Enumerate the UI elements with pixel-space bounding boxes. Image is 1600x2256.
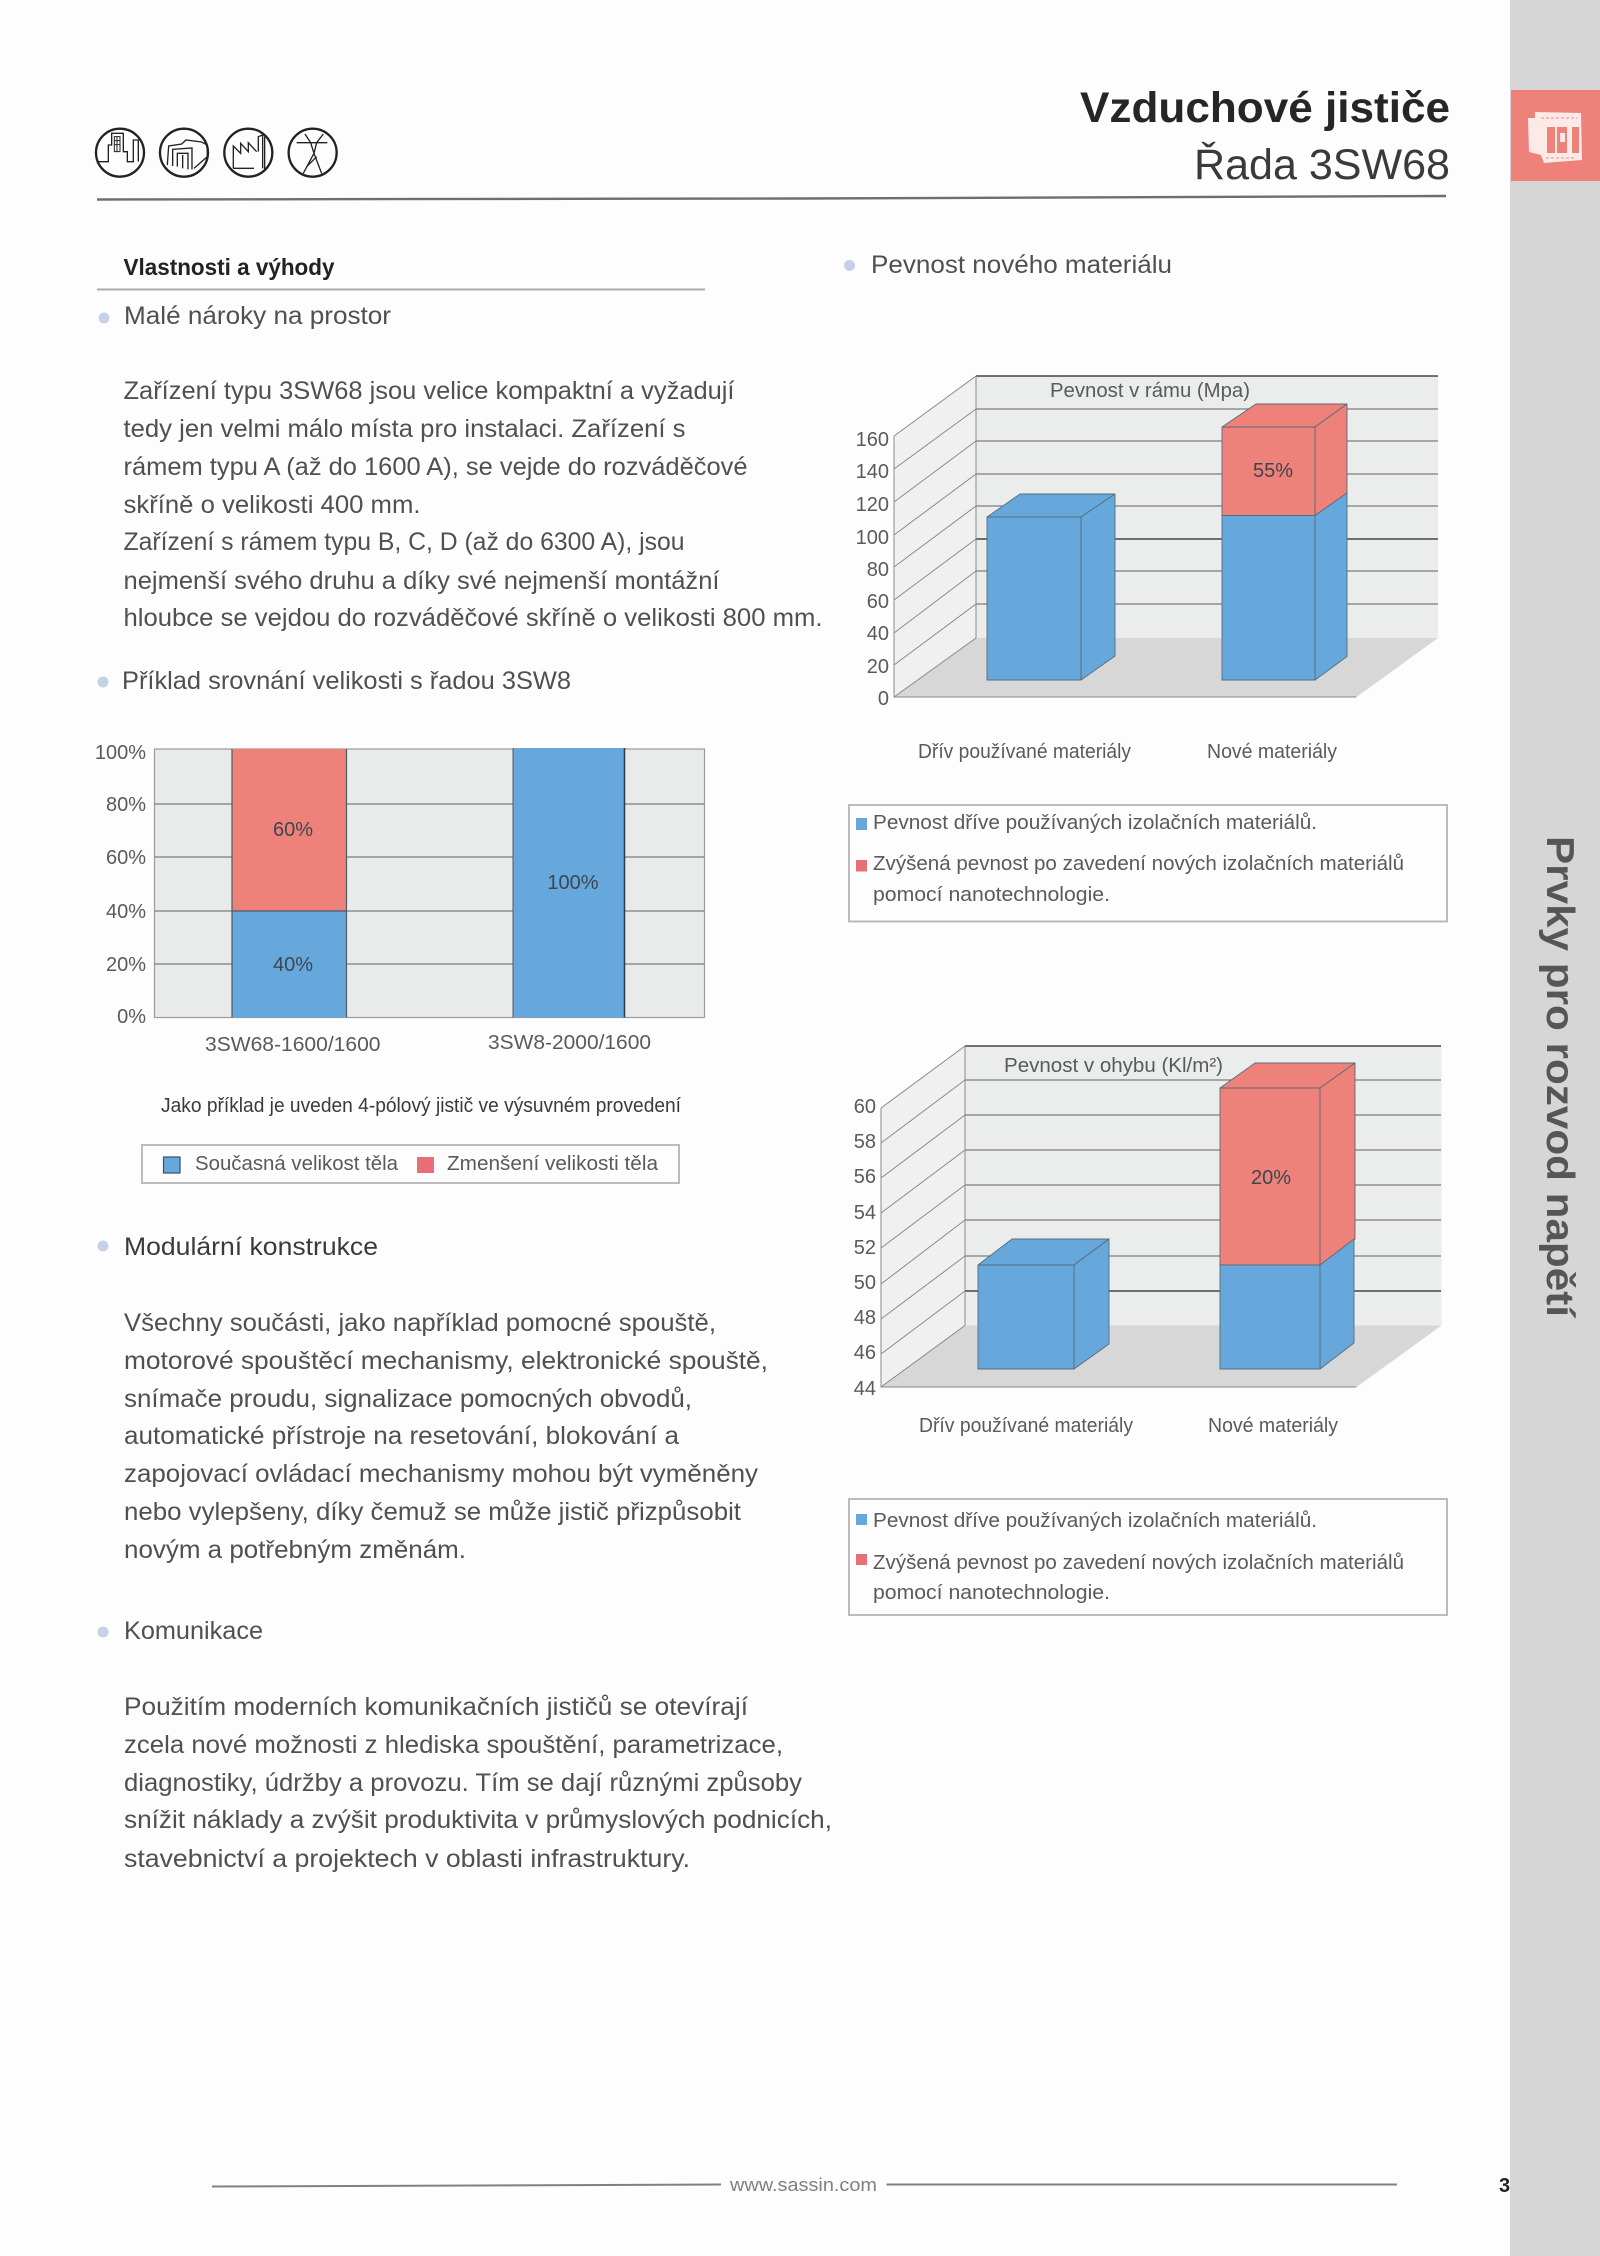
- text block: communication: [124, 1693, 832, 1873]
- sidebar title: Prvky pro rozvod napětí: [1538, 836, 1581, 1318]
- bar: 3SW68: [232, 749, 346, 1018]
- x axis labels: Nové materiály: [1208, 1415, 1338, 1437]
- legend: size comparison: Zmenšení velikosti těla: [447, 1153, 659, 1175]
- heading: small space requirement: Malé nároky na prostor: [124, 302, 391, 330]
- text block: communication: stavebnictví a projektech v oblasti infrastruktury.: [124, 1845, 690, 1873]
- text block: communication: zcela nové možnosti z hlediska spouštění, parametrizace,: [124, 1731, 783, 1759]
- icon: air circuit breaker: [1528, 112, 1582, 163]
- y axis labels: 58: [854, 1131, 876, 1153]
- text block: modular construction: Všechny součásti, jako například pomocné spouště,: [124, 1309, 716, 1337]
- heading: modular construction: Modulární konstrukce: [124, 1233, 378, 1261]
- text block: communication: Použitím moderních komunikačních jističů se otevírají: [124, 1693, 748, 1721]
- icon: factory: [224, 129, 272, 177]
- text block: compactness: hloubce se vejdou do rozváděčové skříně o velikosti 800 mm.: [124, 604, 822, 632]
- text block: modular construction: [124, 1309, 768, 1564]
- note: Jako příklad je uveden 4-pólový jistič ve výsuvném provedení: [161, 1095, 681, 1117]
- y axis labels: 140: [856, 461, 889, 483]
- icon: warehouse: [160, 129, 208, 177]
- header icons: [96, 129, 337, 177]
- chart title: Pevnost v ohybu (Kl/m²): [1004, 1055, 1223, 1077]
- y axis labels: 40: [867, 623, 889, 645]
- text block: compactness: nejmenší svého druhu a díky své nejmenší montážní: [124, 567, 720, 595]
- y axis labels: 160: [856, 429, 889, 451]
- icon: buildings: [96, 129, 144, 177]
- y axis labels: [95, 742, 146, 1028]
- header rule: [97, 196, 1446, 200]
- y axis labels: 80%: [106, 794, 146, 816]
- footer: www.sassin.com: [729, 2175, 877, 2195]
- text block: compactness: Zařízení s rámem typu B, C, D (až do 6300 A), jsou: [124, 528, 684, 556]
- y axis labels: 80: [867, 559, 889, 581]
- bar: 3SW8: 100%: [547, 872, 599, 894]
- y axis labels: [854, 1096, 876, 1400]
- legend: frame strength: Zvýšená pevnost po zavedení nových izolačních materiálů: [873, 853, 1404, 875]
- chart title: Pevnost v rámu (Mpa): [1050, 380, 1250, 402]
- x axis labels: Dřív používané materiály: [919, 1415, 1133, 1437]
- bar: previous materials: [978, 1239, 1109, 1369]
- bar: 3SW8: [513, 748, 624, 1018]
- x axis labels: Dřív používané materiály: [918, 741, 1131, 763]
- text block: modular construction: nebo vylepšeny, díky čemuž se může jistič přizpůsobit: [124, 1498, 741, 1526]
- text block: compactness: [124, 377, 822, 632]
- legend: size comparison: [142, 1145, 679, 1183]
- chart walls and floor: [881, 1046, 1442, 1387]
- text block: modular construction: zapojovací ovládací mechanismy mohou být vyměněny: [124, 1460, 759, 1488]
- y axis labels: 44: [854, 1378, 876, 1400]
- x axis labels: Nové materiály: [1207, 741, 1337, 763]
- heading: new material strength: Pevnost nového materiálu: [871, 251, 1172, 279]
- bar: previous materials: [987, 494, 1115, 680]
- chart walls and floor: [894, 376, 1438, 697]
- text block: modular construction: snímače proudu, signalizace pomocných obvodů,: [124, 1385, 692, 1413]
- sidebar: [1499, 0, 1600, 2256]
- bar: new materials: 55%: [1253, 460, 1293, 482]
- x axis labels: 3SW8-2000/1600: [488, 1032, 651, 1054]
- text block: modular construction: novým a potřebným změnám.: [124, 1536, 466, 1564]
- text block: communication: diagnostiky, údržby a provozu. Tím se dají různými způsoby: [124, 1769, 802, 1797]
- text block: compactness: tedy jen velmi málo místa pro instalaci. Zařízení s: [124, 415, 686, 443]
- section heading: features: Vlastnosti a výhody: [124, 254, 335, 280]
- bar: 3SW68: 40%: [273, 954, 313, 976]
- title: [1080, 84, 1450, 189]
- legend: frame strength: [849, 805, 1447, 922]
- legend: bending strength: pomocí nanotechnologie.: [873, 1582, 1110, 1604]
- y axis labels: 20%: [106, 954, 146, 976]
- text block: compactness: Zařízení typu 3SW68 jsou velice kompaktní a vyžadují: [124, 377, 735, 405]
- y axis labels: 48: [854, 1307, 876, 1329]
- bar: 3SW68: 60%: [273, 819, 313, 841]
- y axis labels: 54: [854, 1202, 876, 1224]
- y axis labels: 50: [854, 1272, 876, 1294]
- bar chart: size comparison: [95, 742, 704, 1056]
- y axis labels: 20: [867, 656, 889, 678]
- x axis labels: [205, 1032, 651, 1056]
- y axis labels: 52: [854, 1237, 876, 1259]
- x axis labels: 3SW68-1600/1600: [205, 1034, 380, 1056]
- legend: bending strength: [849, 1499, 1447, 1615]
- y axis labels: 0%: [117, 1006, 146, 1028]
- y axis labels: 60: [867, 591, 889, 613]
- y axis labels: 56: [854, 1166, 876, 1188]
- heading: communication: Komunikace: [124, 1617, 263, 1645]
- y axis labels: 0: [878, 688, 889, 710]
- page number: 3: [1499, 2175, 1510, 2197]
- y axis labels: 46: [854, 1342, 876, 1364]
- text block: compactness: rámem typu A (až do 1600 A), se vejde do rozváděčové: [124, 453, 748, 481]
- text block: modular construction: automatické přístroje na resetování, blokování a: [124, 1422, 679, 1450]
- legend: frame strength: Pevnost dříve používaných izolačních materiálů.: [873, 812, 1317, 834]
- 3d bar chart: bending strength: [854, 1046, 1442, 1437]
- icon: power pylon: [289, 129, 337, 177]
- y axis labels: [856, 429, 889, 710]
- y axis labels: 40%: [106, 901, 146, 923]
- y axis labels: 100: [856, 527, 889, 549]
- legend: bending strength: Zvýšená pevnost po zavedení nových izolačních materiálů: [873, 1552, 1404, 1574]
- bar: new materials: 20%: [1251, 1167, 1291, 1189]
- sidebar tab: [1511, 90, 1600, 181]
- legend: bending strength: Pevnost dříve používaných izolačních materiálů.: [873, 1510, 1317, 1532]
- y axis labels: 60%: [106, 847, 146, 869]
- bar: new materials: [1222, 404, 1347, 680]
- legend: frame strength: pomocí nanotechnologie.: [873, 884, 1110, 906]
- legend: size comparison: Současná velikost těla: [195, 1153, 399, 1175]
- x axis labels: [918, 741, 1337, 763]
- 3d bar chart: frame strength: [856, 376, 1438, 763]
- subtitle: Řada 3SW68: [1194, 141, 1450, 189]
- y axis labels: 120: [856, 494, 889, 516]
- bar: new materials: [1220, 1063, 1355, 1369]
- text block: modular construction: motorové spouštěcí mechanismy, elektronické spouště,: [124, 1347, 768, 1375]
- text block: communication: snížit náklady a zvýšit produktivita v průmyslových podnicích,: [124, 1806, 832, 1834]
- title: Vzduchové jističe: [1080, 84, 1450, 132]
- text block: compactness: skříně o velikosti 400 mm.: [124, 491, 420, 519]
- x axis labels: [919, 1415, 1338, 1437]
- y axis labels: 100%: [95, 742, 146, 764]
- heading: size comparison: Příklad srovnání velikosti s řadou 3SW8: [122, 667, 571, 695]
- y axis labels: 60: [854, 1096, 876, 1118]
